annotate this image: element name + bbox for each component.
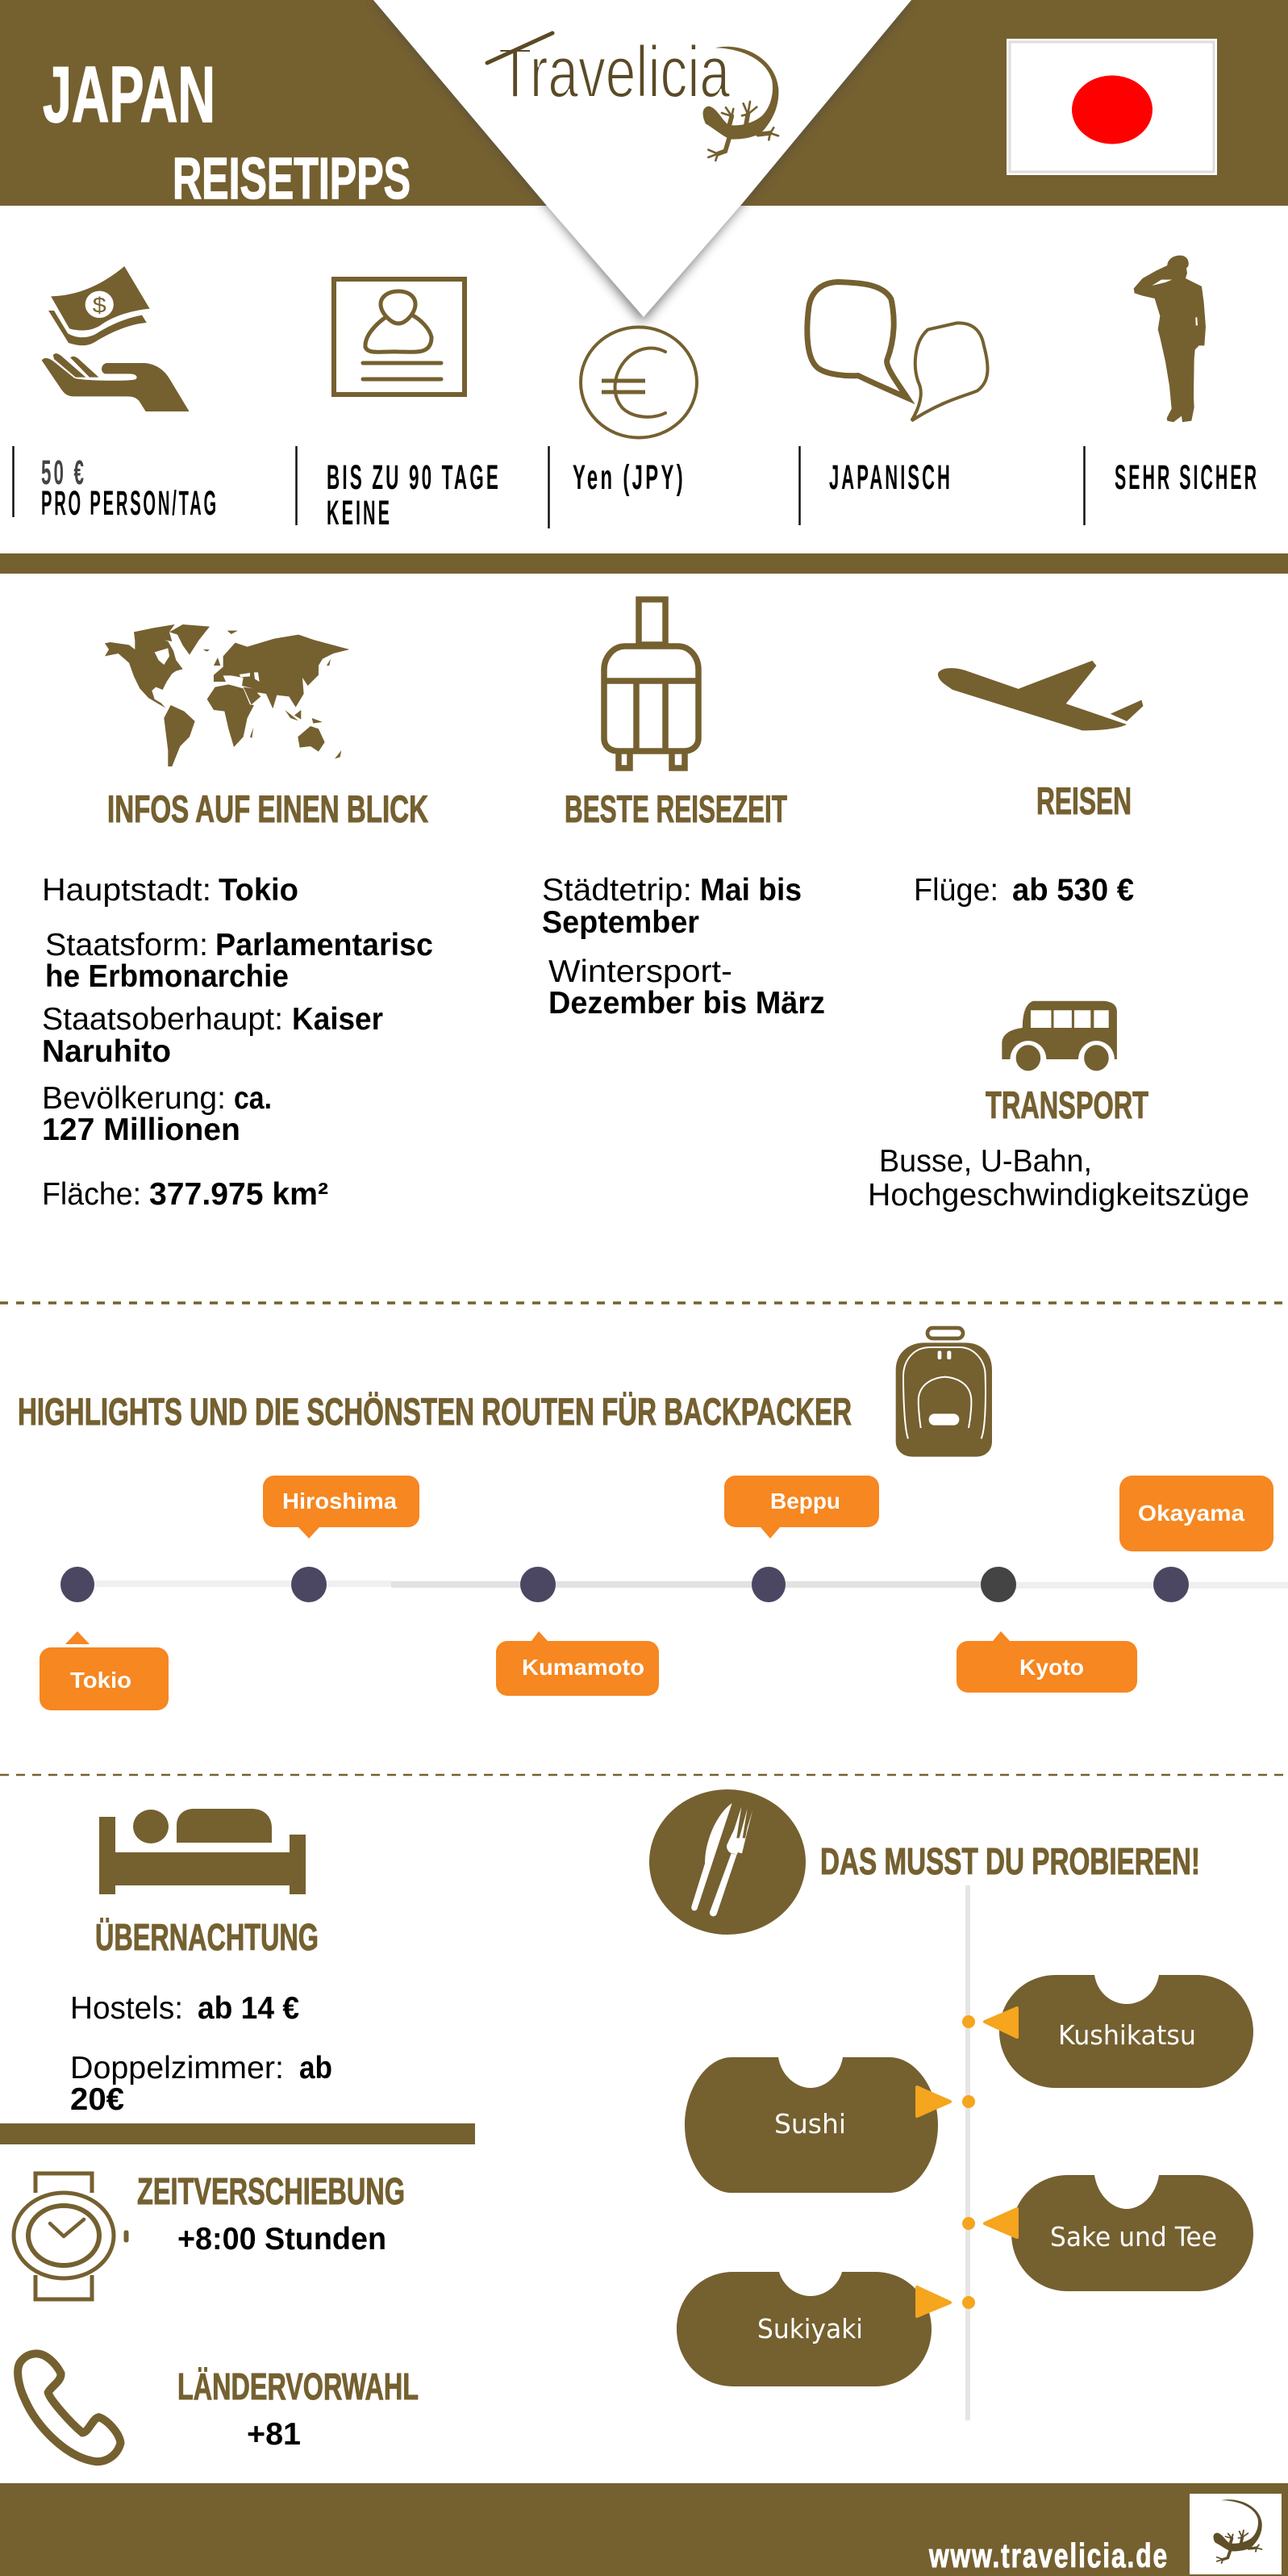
card: Sake und Tee: Sake und Tee [1050, 2221, 1217, 2252]
panel: footer [0, 2483, 1288, 2576]
timeline track [60, 1567, 1288, 1602]
panel: general information [42, 599, 1249, 1213]
heading: accommodation: ÜBERNACHTUNG [95, 1916, 319, 1958]
text: area [42, 1177, 328, 1212]
heading: infos: INFOS AUF EINEN BLICK [107, 787, 428, 830]
heading: highlights: HIGHLIGHTS UND DIE SCHÖNSTEN ROUTEN FÜR BACKPACKER [18, 1390, 852, 1433]
card: Sushi [685, 2057, 975, 2193]
callout: Kumamoto [496, 1631, 659, 1696]
callout: Hiroshima [263, 1476, 419, 1539]
text: double room: ab [299, 2051, 332, 2085]
heading: country code: LÄNDERVORWAHL [177, 2365, 419, 2407]
text: head of state [42, 1002, 383, 1069]
icon: wrist watch [14, 2173, 128, 2299]
card: Sukiyaki [677, 2272, 975, 2386]
card: Sushi: Sushi [774, 2108, 846, 2140]
icon: passport document [334, 279, 465, 395]
text: flights: ab 530 € [1012, 873, 1134, 908]
text: double room: Doppelzimmer: [70, 2051, 284, 2085]
text: city trip [542, 873, 802, 940]
callout: Hiroshima: Hiroshima [282, 1488, 397, 1513]
text: head of state: Naruhito [42, 1034, 171, 1069]
logo: gecko box [1190, 2494, 1282, 2574]
label: language: JAPANISCH [829, 458, 952, 497]
text: transport options: Hochgeschwindigkeitszüge [868, 1178, 1249, 1213]
callout: Kyoto [957, 1631, 1137, 1693]
panel: accommodation [70, 1809, 332, 2117]
text: hours: +8:00 Stunden [177, 2222, 386, 2257]
card: Sake und Tee [962, 2175, 1253, 2291]
label: visa [327, 458, 501, 532]
text: hostels: Hostels: [70, 1991, 183, 2026]
icon: speech bubbles [807, 282, 988, 420]
text: form of government: Staatsform: [45, 928, 208, 962]
panel: highlights and routes [18, 1328, 1288, 1710]
icon: bed [99, 1809, 306, 1894]
callout: Tokio: Tokio [70, 1668, 131, 1693]
card: Sukiyaki: Sukiyaki [757, 2313, 863, 2344]
subtitle: Reisetipps: REISETIPPS [173, 147, 411, 211]
text: form of government [45, 928, 433, 994]
text: population: ca. [234, 1081, 272, 1116]
text: hostels: ab 14 € [198, 1991, 299, 2026]
text: area: 377.975 km² [149, 1177, 328, 1212]
text: head of state: Kaiser [292, 1002, 383, 1037]
icon: world map [105, 624, 349, 766]
text: double room [70, 2051, 332, 2117]
text: transport options [868, 1144, 1249, 1213]
icon: euro coin [581, 328, 697, 437]
text: population [42, 1081, 272, 1147]
panel: quick facts row [13, 256, 1259, 532]
callout: Okayama [1119, 1476, 1273, 1551]
text: website: www.travelicia.de [928, 2536, 1169, 2574]
text: winter sports: Dezember bis März [548, 986, 825, 1021]
text: double room: 20€ [70, 2082, 124, 2117]
text: population: 127 Millionen [42, 1113, 240, 1147]
icon: backpack [896, 1328, 992, 1457]
text: capital [42, 873, 298, 908]
heading: best travel time: BESTE REISEZEIT [565, 787, 787, 830]
callout: Kyoto: Kyoto [1019, 1655, 1084, 1680]
icon: airplane [938, 661, 1143, 730]
text: city trip: Städtetrip: [542, 873, 692, 908]
panel: food to try [649, 1789, 1253, 2420]
icon: knife and fork [649, 1789, 806, 1935]
callout: Beppu [724, 1476, 879, 1539]
card: Kushikatsu: Kushikatsu [1058, 2019, 1196, 2051]
text: hostels [70, 1991, 299, 2026]
icon: money in hand [42, 266, 190, 411]
label: visa: KEINE [327, 494, 392, 532]
card: Kushikatsu [962, 1975, 1253, 2088]
heading: travel: REISEN [1036, 779, 1132, 822]
text: code: +81 [247, 2417, 301, 2452]
panel: quick facts row: PRO PERSON/TAG [41, 484, 219, 523]
callout: Okayama: Okayama [1138, 1501, 1244, 1526]
icon: saluting soldier [1134, 256, 1206, 422]
flag of Japan [1007, 39, 1217, 175]
title: Japan: JAPAN [43, 50, 215, 139]
logo: Travelicia with gecko [487, 32, 778, 161]
label: currency: Yen (JPY) [573, 458, 686, 497]
panel: time difference [14, 2170, 405, 2299]
text: transport options: Busse, U-Bahn, [879, 1144, 1092, 1179]
text: population: Bevölkerung: [42, 1081, 226, 1116]
label: budget: 50 € [41, 453, 86, 492]
label: visa: BIS ZU 90 TAGE [327, 458, 501, 497]
text: city trip: September [542, 905, 699, 940]
callout: Tokio [40, 1631, 169, 1710]
panel: header band [0, 0, 1288, 323]
heading: time difference: ZEITVERSCHIEBUNG [137, 2170, 405, 2212]
text: area: Fläche: [42, 1177, 141, 1212]
icon: suitcase [604, 599, 698, 768]
heading: transport: TRANSPORT [986, 1083, 1148, 1126]
text: capital: Tokio [219, 873, 298, 908]
text: form of government: he Erbmonarchie [45, 959, 289, 994]
text: capital: Hauptstadt: [42, 873, 211, 908]
label: budget [41, 453, 219, 523]
text: flights: Flüge: [914, 873, 998, 908]
panel: country code [18, 2353, 419, 2461]
icon: bus [1002, 1001, 1117, 1078]
text: winter sports [548, 954, 825, 1021]
text: flights [914, 873, 1134, 908]
icon: money in hand: $ [93, 294, 106, 318]
text: city trip: Mai bis [700, 873, 802, 908]
logo: Travelicia with gecko: Travelicia [498, 32, 731, 113]
callout: Kumamoto: Kumamoto [522, 1655, 644, 1680]
icon: telephone [18, 2353, 120, 2461]
text: form of government: Parlamentarisc [215, 928, 433, 962]
callout: Beppu: Beppu [770, 1488, 840, 1513]
text: head of state: Staatsoberhaupt: [42, 1002, 283, 1037]
text: winter sports: Wintersport- [548, 954, 732, 989]
